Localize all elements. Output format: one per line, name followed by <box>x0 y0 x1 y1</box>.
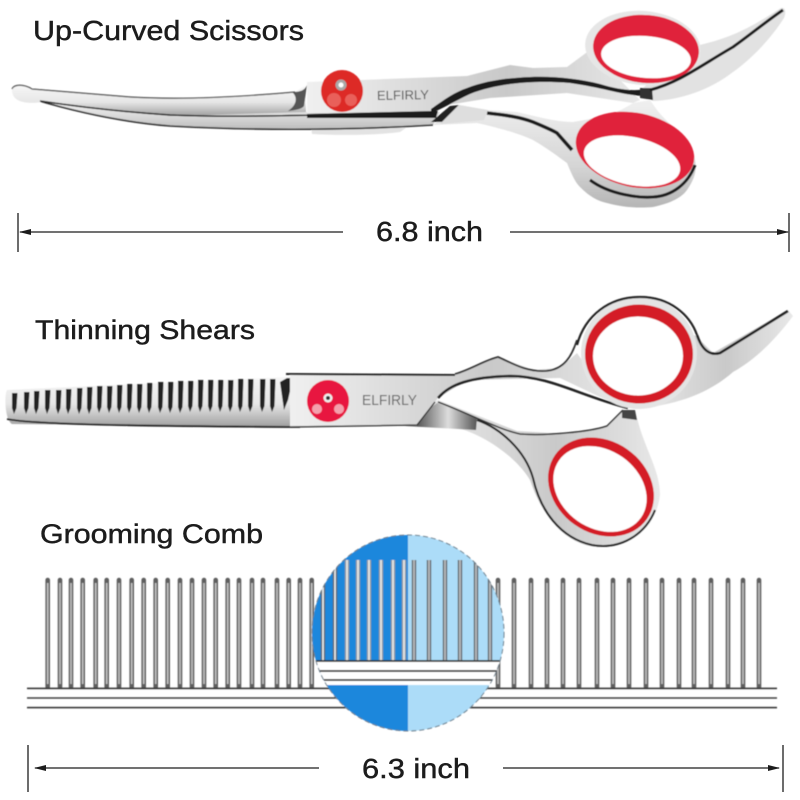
lower arm and handle <box>400 400 660 547</box>
blade body and upper arm <box>290 353 627 427</box>
body and upper handle arm <box>307 50 640 113</box>
magnified teeth <box>323 560 490 660</box>
chart: comb <box>27 530 777 735</box>
brand mark: ELFIRLY <box>362 392 417 409</box>
lower finger ring <box>569 101 701 199</box>
magnified spine <box>310 661 510 685</box>
thinning blade <box>5 376 300 427</box>
upper finger ring <box>582 6 704 90</box>
comb spine <box>27 688 777 708</box>
dimension: 6.8 inch: 6.8 inch <box>376 216 483 247</box>
brand mark: ELFIRLY <box>377 87 429 103</box>
shadow under the pivot <box>310 118 420 135</box>
icon: up-curved scissors <box>12 6 785 208</box>
upper finger ring <box>581 297 697 409</box>
lower finger ring <box>529 417 673 557</box>
pivot screw <box>307 380 349 422</box>
blade teeth <box>12 378 293 414</box>
lower handle <box>433 100 696 208</box>
icon: thinning shears <box>5 297 793 557</box>
title: Thinning Shears: Thinning Shears <box>35 315 255 345</box>
magnifier lens <box>310 530 510 735</box>
lower blade <box>36 100 440 129</box>
finger tang <box>640 8 785 101</box>
finger tang <box>625 310 793 409</box>
comb teeth <box>48 580 759 687</box>
pivot screw <box>321 70 363 112</box>
title: Grooming Comb: Grooming Comb <box>40 519 263 549</box>
title: Up-Curved Scissors: Up-Curved Scissors <box>33 15 304 46</box>
dimension: 6.3 inch: 6.3 inch <box>362 753 470 784</box>
upper blade <box>12 85 306 116</box>
